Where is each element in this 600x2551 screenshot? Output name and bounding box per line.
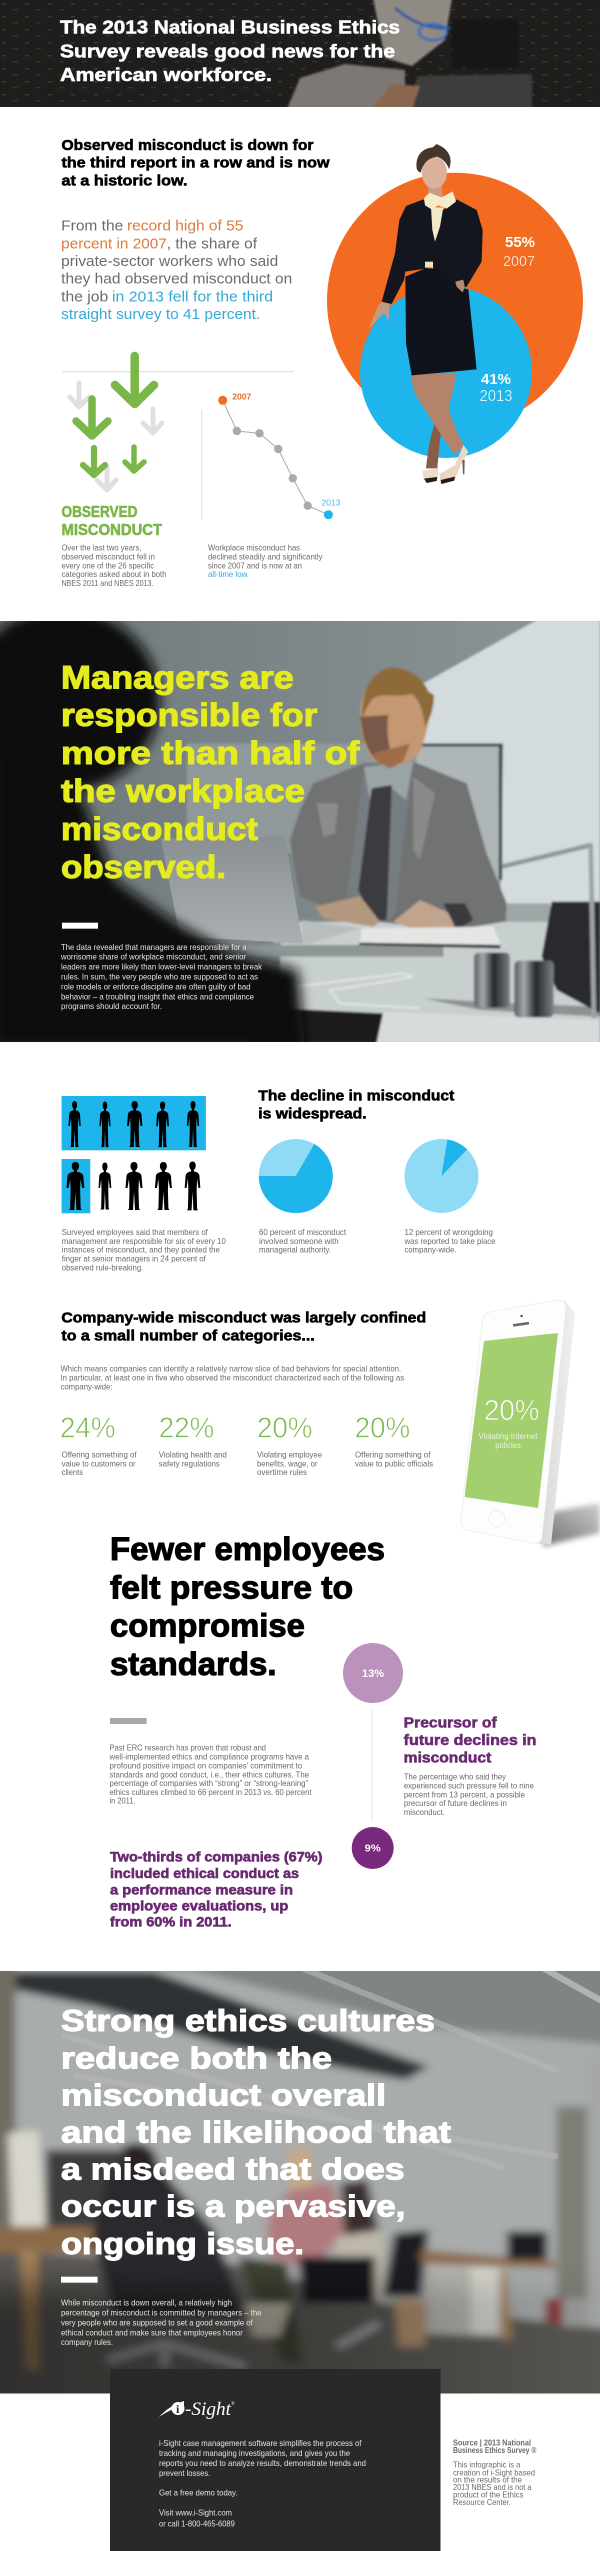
callout: two-thirds of companies: a performance measure in bbox=[110, 1882, 293, 1897]
source heading: Source | 2013 National bbox=[453, 2439, 531, 2448]
circle: 9 percent: 9% bbox=[365, 1842, 381, 1854]
heading: decline widespread bbox=[258, 1088, 454, 1122]
heading: company-wide misconduct: to a small number of categories... bbox=[61, 1328, 315, 1345]
heading: observed misconduct down: at a historic low. bbox=[62, 172, 188, 189]
callout: two-thirds of companies: employee evaluations, up bbox=[110, 1898, 288, 1913]
header title: The 2013 National Business Ethics bbox=[60, 16, 400, 38]
heading: fewer employees bbox=[110, 1531, 385, 1682]
source disclaimer: creation of i-Sight based bbox=[453, 2468, 535, 2477]
text: pie 60 caption: 60 percent of misconduct bbox=[259, 1228, 347, 1237]
circle: 13 percent bbox=[343, 1643, 403, 1703]
text: surveyed employees: observed rule-breaking. bbox=[62, 1263, 143, 1272]
stat: 22 percent: Violating health and bbox=[159, 1450, 227, 1459]
stat: 20 percent wage: 20% bbox=[257, 1412, 312, 1444]
panel: fewer employees felt pressure bbox=[109, 1531, 537, 1929]
text: narrow slice: In particular, at least one in five who observed the misconduct characterized each of the following as bbox=[60, 1374, 404, 1383]
text: over the last two years bbox=[62, 544, 167, 588]
text: data revealed: role models or enforce discipline are often guilty of bad bbox=[61, 981, 251, 991]
text: data revealed: behavior – a troubling insight that ethics and compliance bbox=[61, 991, 254, 1001]
source disclaimer: on the results of the bbox=[453, 2476, 522, 2485]
intro paragraph: , the share of bbox=[167, 235, 258, 252]
stat: 22 percent: 22% bbox=[159, 1412, 214, 1444]
callout: two-thirds of companies: Two-thirds of companies (67%) bbox=[110, 1850, 322, 1865]
divider vertical bbox=[201, 410, 202, 520]
text: contact bbox=[159, 2507, 235, 2529]
chart: misconduct line 2007-2013 bbox=[218, 391, 341, 519]
chart: misconduct line 2007-2013: 2007 bbox=[232, 391, 252, 401]
heading: precursor: Precursor of bbox=[404, 1714, 498, 1731]
heading: company-wide misconduct: Company-wide misconduct was largely confined bbox=[61, 1310, 426, 1327]
heading: observed misconduct down: Observed misconduct is down for bbox=[62, 137, 314, 154]
text: data revealed bbox=[60, 942, 263, 1011]
text: surveyed employees: management are responsible for six of every 10 bbox=[62, 1237, 226, 1246]
icon: phone with 20 percent bbox=[461, 1300, 600, 1546]
intro paragraph: private-sector workers who said bbox=[61, 253, 278, 270]
chart: pie 60 percent bbox=[259, 1139, 333, 1213]
stat: 22 percent: safety regulations bbox=[159, 1459, 220, 1468]
heading: fewer employees: felt pressure to bbox=[110, 1569, 353, 1605]
source disclaimer: product of the Ethics bbox=[453, 2490, 523, 2499]
text: contact: Visit www.i-Sight.com bbox=[159, 2507, 232, 2517]
stat: 20 percent public officials: value to public officials bbox=[355, 1459, 433, 1468]
heading: precursor: future declines in bbox=[404, 1732, 536, 1749]
panel: i-Sight footer box bbox=[110, 2369, 440, 2551]
text: percentage pressure bbox=[404, 1773, 534, 1817]
text: while misconduct is down: very people who are supposed to set a good example of bbox=[61, 2317, 253, 2327]
heading: precursor bbox=[404, 1714, 536, 1767]
text: over the last two years: observed misconduct fell in bbox=[62, 552, 155, 561]
label: observed misconduct bbox=[62, 504, 163, 539]
text: pie 60 caption: managerial authority. bbox=[259, 1246, 331, 1255]
divider bbox=[62, 371, 294, 372]
source disclaimer: Resource Center. bbox=[453, 2498, 511, 2507]
heading: fewer employees: standards. bbox=[110, 1646, 276, 1682]
text: pie 60 caption bbox=[259, 1228, 347, 1255]
text: surveyed employees bbox=[62, 1228, 226, 1272]
text: while misconduct is down: ethical conduct and make sure that employees honor bbox=[61, 2327, 243, 2337]
text: past ERC research: standards and good conduct, i.e., their ethics cultures. The bbox=[110, 1770, 309, 1779]
stat: 20 percent wage: overtime rules bbox=[257, 1468, 307, 1477]
text: data revealed: programs should account for. bbox=[61, 1001, 162, 1011]
text: data revealed: rules. In sum, the very people who are supposed to act as bbox=[61, 971, 258, 981]
source disclaimer: 2013 NBES and is not a bbox=[453, 2483, 532, 2492]
panel: observed misconduct bbox=[61, 137, 583, 588]
text: over the last two years: NBES 2011 and NBES 2013. bbox=[62, 579, 154, 588]
text: past ERC research: ethics cultures climbed to 66 percent in 2013 vs. 60 percent bbox=[110, 1788, 312, 1797]
label: observed misconduct: MISCONDUCT bbox=[62, 522, 163, 539]
logo: i-Sight: -Sight bbox=[185, 2399, 232, 2420]
heading: strong ethics cultures: ongoing issue. bbox=[61, 2227, 304, 2261]
panel: source note bbox=[453, 2439, 536, 2507]
heading: decline widespread: The decline in misconduct bbox=[258, 1088, 454, 1105]
intro paragraph bbox=[61, 218, 292, 323]
logo: i-Sight: ® bbox=[231, 2401, 235, 2407]
text: narrow slice: Which means companies can identify a relatively narrow slice of bad behaviors for special attention. bbox=[60, 1365, 401, 1374]
stat: 20 percent wage bbox=[257, 1412, 322, 1477]
text: past ERC research bbox=[109, 1744, 312, 1806]
text: workplace misconduct declined: declined steadily and significantly bbox=[208, 553, 323, 562]
heading: managers responsible: misconduct bbox=[61, 811, 258, 847]
text: percentage pressure: precursor of future declines in bbox=[404, 1799, 507, 1808]
text: while misconduct is down: percentage of misconduct is committed by managers – the bbox=[61, 2308, 262, 2318]
intro paragraph: record high of 55 bbox=[127, 218, 243, 235]
text: pie 12 caption: company-wide. bbox=[404, 1246, 456, 1255]
text: past ERC research: percentage of companies with “strong” or “strong-leaning” bbox=[110, 1779, 308, 1788]
text: company description: tracking and managing investigations, and gives you the bbox=[159, 2448, 350, 2458]
chart: overlapping circles 55% vs 41%: 2013 bbox=[480, 388, 512, 405]
text: past ERC research: Past ERC research has proven that robust and bbox=[110, 1744, 266, 1753]
heading: company-wide misconduct bbox=[61, 1310, 426, 1345]
header title: Survey reveals good news for the bbox=[60, 40, 395, 62]
text: workplace misconduct declined: all-time low. bbox=[208, 570, 249, 579]
icon: phone with 20 percent: 20% bbox=[484, 1395, 539, 1427]
text: over the last two years: categories asked about in both bbox=[62, 570, 167, 579]
text: while misconduct is down: While misconduct is down overall, a relatively high bbox=[61, 2298, 232, 2308]
heading: strong ethics cultures: and the likelihood that bbox=[61, 2115, 451, 2149]
heading: managers responsible: the workplace bbox=[61, 773, 305, 809]
text: surveyed employees: finger at senior managers in 24 percent of bbox=[62, 1254, 206, 1263]
heading: fewer employees: compromise bbox=[110, 1608, 305, 1644]
chart: overlapping circles 55% vs 41% bbox=[327, 173, 583, 458]
panel: company-wide categories bbox=[60, 1300, 600, 1546]
text: data revealed: The data revealed that managers are responsible for a bbox=[61, 942, 247, 952]
stat: 20 percent wage: Violating employee bbox=[257, 1450, 322, 1459]
heading: strong ethics cultures: misconduct overall bbox=[61, 2078, 386, 2112]
text: percentage pressure: percent from 13 percent, a possible bbox=[404, 1790, 525, 1799]
heading: observed misconduct down bbox=[62, 137, 330, 189]
stat: 20 percent public officials bbox=[355, 1412, 433, 1468]
text: percentage pressure: misconduct. bbox=[404, 1808, 445, 1817]
heading: managers responsible: more than half of bbox=[61, 735, 360, 771]
stat: 24 percent bbox=[60, 1412, 137, 1477]
figure: businesswoman bbox=[369, 144, 483, 484]
panel: managers photo section bbox=[0, 608, 600, 1050]
stat: 20 percent public officials: Offering something of bbox=[355, 1450, 431, 1459]
intro paragraph: they had observed misconduct on bbox=[61, 271, 292, 288]
heading: observed misconduct down: the third report in a row and is now bbox=[62, 155, 330, 172]
chart: overlapping circles 55% vs 41%: 41% bbox=[481, 371, 511, 388]
white bar bbox=[61, 2277, 98, 2283]
icon: six of ten silhouettes bbox=[62, 1096, 206, 1213]
text: company description bbox=[159, 2438, 366, 2478]
label: observed misconduct: OBSERVED bbox=[62, 504, 138, 521]
text: while misconduct is down: company rules. bbox=[61, 2337, 113, 2347]
text: while misconduct is down bbox=[61, 2298, 262, 2347]
source disclaimer: This infographic is a bbox=[453, 2461, 521, 2470]
panel: header banner bbox=[0, 0, 600, 109]
gray bar bbox=[110, 1718, 147, 1724]
text: narrow slice: company-wide: bbox=[60, 1382, 112, 1391]
heading: managers responsible: responsible for bbox=[61, 697, 318, 733]
intro paragraph: percent in 2007 bbox=[61, 235, 167, 252]
text: pie 12 caption: was reported to take place bbox=[404, 1237, 496, 1246]
connector line bbox=[372, 1710, 373, 1821]
chart: pie 12 percent bbox=[404, 1139, 478, 1213]
text: pie 60 caption: involved someone with bbox=[259, 1237, 339, 1246]
intro paragraph: From the bbox=[61, 218, 123, 235]
circle: 9 percent bbox=[352, 1827, 394, 1869]
source disclaimer bbox=[453, 2461, 535, 2507]
icon: phone with 20 percent: policies bbox=[495, 1441, 521, 1450]
callout: two-thirds of companies: included ethical conduct as bbox=[110, 1866, 299, 1881]
heading: strong ethics cultures bbox=[61, 2004, 451, 2261]
chart: misconduct line 2007-2013: 2013 bbox=[322, 498, 341, 508]
source heading bbox=[453, 2439, 536, 2455]
text: company description: prevent losses. bbox=[159, 2468, 210, 2478]
text: data revealed: worrisome share of workplace misconduct, and senior bbox=[60, 952, 246, 962]
callout: two-thirds of companies: from 60% in 2011. bbox=[110, 1914, 232, 1929]
source heading: Business Ethics Survey ® bbox=[453, 2446, 536, 2455]
text: surveyed employees: instances of misconduct, and they pointed the bbox=[62, 1246, 220, 1255]
text: workplace misconduct declined bbox=[208, 544, 323, 579]
heading: strong ethics cultures: reduce both the bbox=[61, 2041, 332, 2075]
stat: 24 percent: clients bbox=[62, 1468, 83, 1477]
intro paragraph: the job bbox=[61, 288, 108, 305]
text: surveyed employees: Surveyed employees said that members of bbox=[62, 1228, 208, 1237]
chart: overlapping circles 55% vs 41%: 2007 bbox=[503, 253, 535, 270]
heading: precursor: misconduct bbox=[404, 1750, 491, 1767]
heading: strong ethics cultures: a misdeed that does bbox=[61, 2152, 405, 2186]
header background photo bbox=[0, 0, 600, 109]
heading: fewer employees: Fewer employees bbox=[110, 1531, 385, 1567]
stat: 20 percent public officials: 20% bbox=[355, 1412, 410, 1444]
stat: 24 percent: Offering something of bbox=[62, 1450, 137, 1459]
text: free demo: Get a free demo today. bbox=[159, 2488, 238, 2498]
text: past ERC research: in 2011. bbox=[110, 1797, 136, 1806]
text: company description: reports you need to analyze results, demonstrate trends and bbox=[159, 2458, 366, 2468]
manager office photo bbox=[0, 608, 600, 1050]
heading: managers responsible bbox=[61, 659, 360, 885]
icon: phone with 20 percent: Violating Internet bbox=[478, 1432, 538, 1441]
header title bbox=[60, 16, 400, 85]
text: over the last two years: Over the last two years, bbox=[62, 544, 142, 553]
panel: strong ethics cultures bbox=[0, 1971, 600, 2394]
text: contact: or call 1-800-465-6089 bbox=[159, 2519, 235, 2529]
text: past ERC research: well-implemented ethics and compliance programs have a bbox=[109, 1753, 309, 1762]
icon: down arrows bbox=[70, 356, 162, 490]
callout: two-thirds of companies bbox=[110, 1850, 322, 1929]
heading: strong ethics cultures: Strong ethics cultures bbox=[61, 2004, 435, 2038]
logo: i-Sight: i bbox=[176, 2402, 180, 2416]
heading: decline widespread: is widespread. bbox=[258, 1105, 367, 1122]
chart: overlapping circles 55% vs 41%: 55% bbox=[505, 235, 535, 251]
text: workplace misconduct declined: since 2007 and is now at an bbox=[208, 561, 302, 570]
intro paragraph: straight survey to 41 percent. bbox=[61, 306, 260, 323]
blurred office photo bbox=[0, 1971, 600, 2394]
text: data revealed: leaders are more likely than lower-level managers to break bbox=[61, 962, 263, 972]
heading: strong ethics cultures: occur is a pervasive, bbox=[61, 2189, 405, 2223]
stat: 24 percent: value to customers or bbox=[62, 1459, 136, 1468]
white bar bbox=[62, 923, 98, 929]
text: company description: i-Sight case management software simplifies the process of bbox=[159, 2438, 362, 2448]
panel: decline is widespread bbox=[62, 1088, 496, 1272]
header title: American workforce. bbox=[60, 64, 272, 85]
stat: 20 percent wage: benefits, wage, or bbox=[257, 1459, 318, 1468]
text: over the last two years: every one of the 26 specific bbox=[62, 561, 154, 570]
text: pie 12 caption bbox=[404, 1228, 496, 1255]
circle: 13 percent: 13% bbox=[362, 1668, 384, 1680]
text: percentage pressure: The percentage who said they bbox=[404, 1773, 507, 1782]
text: workplace misconduct declined: Workplace misconduct has bbox=[208, 544, 300, 553]
stat: 22 percent bbox=[159, 1412, 227, 1468]
heading: managers responsible: Managers are bbox=[61, 659, 294, 695]
intro paragraph: in 2013 fell for the third bbox=[112, 288, 273, 305]
text: past ERC research: profound positive impact on companies’ commitment to bbox=[110, 1762, 303, 1771]
heading: managers responsible: observed. bbox=[61, 849, 226, 885]
text: pie 12 caption: 12 percent of wrongdoing bbox=[404, 1228, 493, 1237]
logo: i-Sight bbox=[159, 2399, 235, 2420]
text: narrow slice bbox=[60, 1365, 404, 1391]
text: percentage pressure: experienced such pressure fell to nine bbox=[404, 1781, 534, 1790]
stat: 24 percent: 24% bbox=[60, 1412, 116, 1444]
